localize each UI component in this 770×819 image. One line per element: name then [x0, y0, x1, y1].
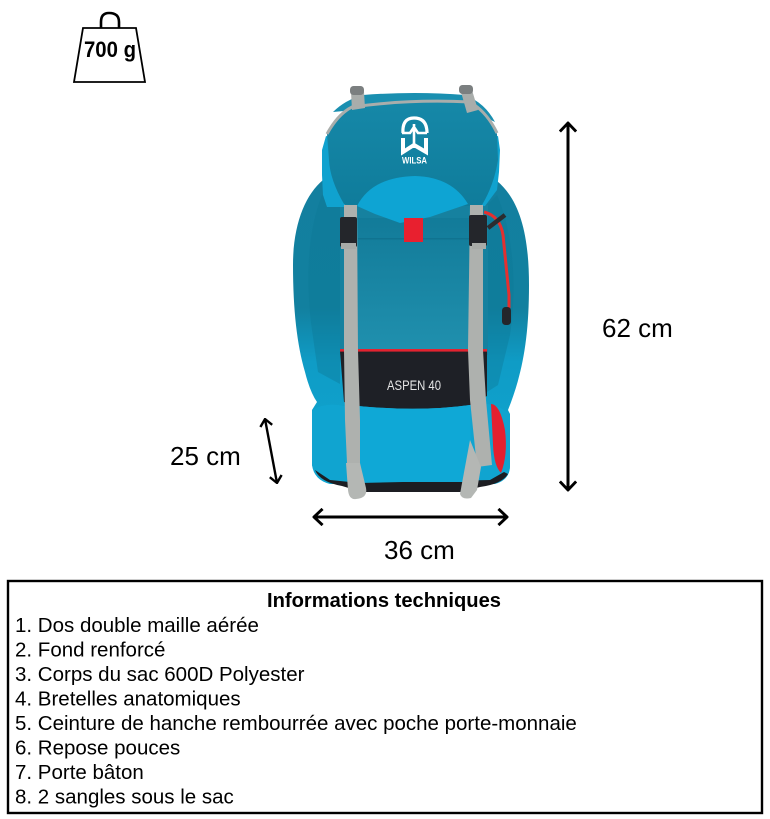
central body: [340, 205, 488, 355]
label: width 36 cm: 36 cm: [384, 535, 455, 565]
arrow: height: [566, 123, 570, 490]
bottom strip: [315, 470, 508, 492]
logo WILSA: WILSA: [402, 156, 427, 166]
label: depth 25 cm: 25 cm: [170, 441, 241, 471]
list of features: 4. Bretelles anatomiques: [15, 688, 241, 710]
list of features: 5. Ceinture de hanche rembourrée avec poche porte-monnaie: [15, 712, 577, 735]
label: height 62 cm: 62 cm: [602, 313, 673, 343]
bottom compartment: [312, 404, 510, 481]
icon: weight 700 g: 700 g: [84, 37, 136, 62]
logo WILSA: [402, 118, 427, 166]
mesh pocket: [358, 218, 470, 351]
arrow: width: [314, 516, 507, 518]
pocket seam: [358, 238, 470, 240]
list of features: 6. Repose pouces: [15, 736, 180, 760]
red trim: [340, 349, 487, 352]
flap opening: [357, 176, 468, 223]
lower centre panel: [358, 405, 472, 482]
red pole loop: [491, 404, 506, 473]
list of features: 3. Corps du sac 600D Polyester: [15, 663, 305, 686]
red cord: [484, 212, 509, 308]
list of features: 1. Dos double maille aérée: [15, 614, 259, 637]
lid: [327, 100, 498, 206]
side fold shading: [308, 195, 514, 392]
panel heading: Informations techniques: [267, 590, 501, 612]
arrow: depth: [265, 419, 277, 483]
list of features: [15, 614, 577, 808]
list of features: 8. 2 sangles sous le sac: [15, 786, 234, 808]
ASPEN 40 label: ASPEN 40: [387, 377, 441, 393]
top buckles: [351, 90, 478, 113]
left strap: [344, 205, 360, 463]
backpack illustration: [293, 85, 529, 499]
lid sides: [322, 136, 500, 207]
icon: weight 700 g: [74, 13, 145, 82]
lid top: [333, 93, 495, 122]
list of features: 7. Porte bâton: [15, 761, 144, 784]
right strap: [468, 205, 492, 467]
black panel: [340, 351, 487, 409]
lid binding: [327, 101, 497, 134]
side pockets: [293, 180, 529, 484]
list of features: 2. Fond renforcé: [15, 638, 165, 662]
panel: technical information: [8, 581, 762, 813]
right buckle: [469, 215, 487, 246]
left buckle: [340, 217, 357, 247]
red tab: [404, 218, 423, 242]
